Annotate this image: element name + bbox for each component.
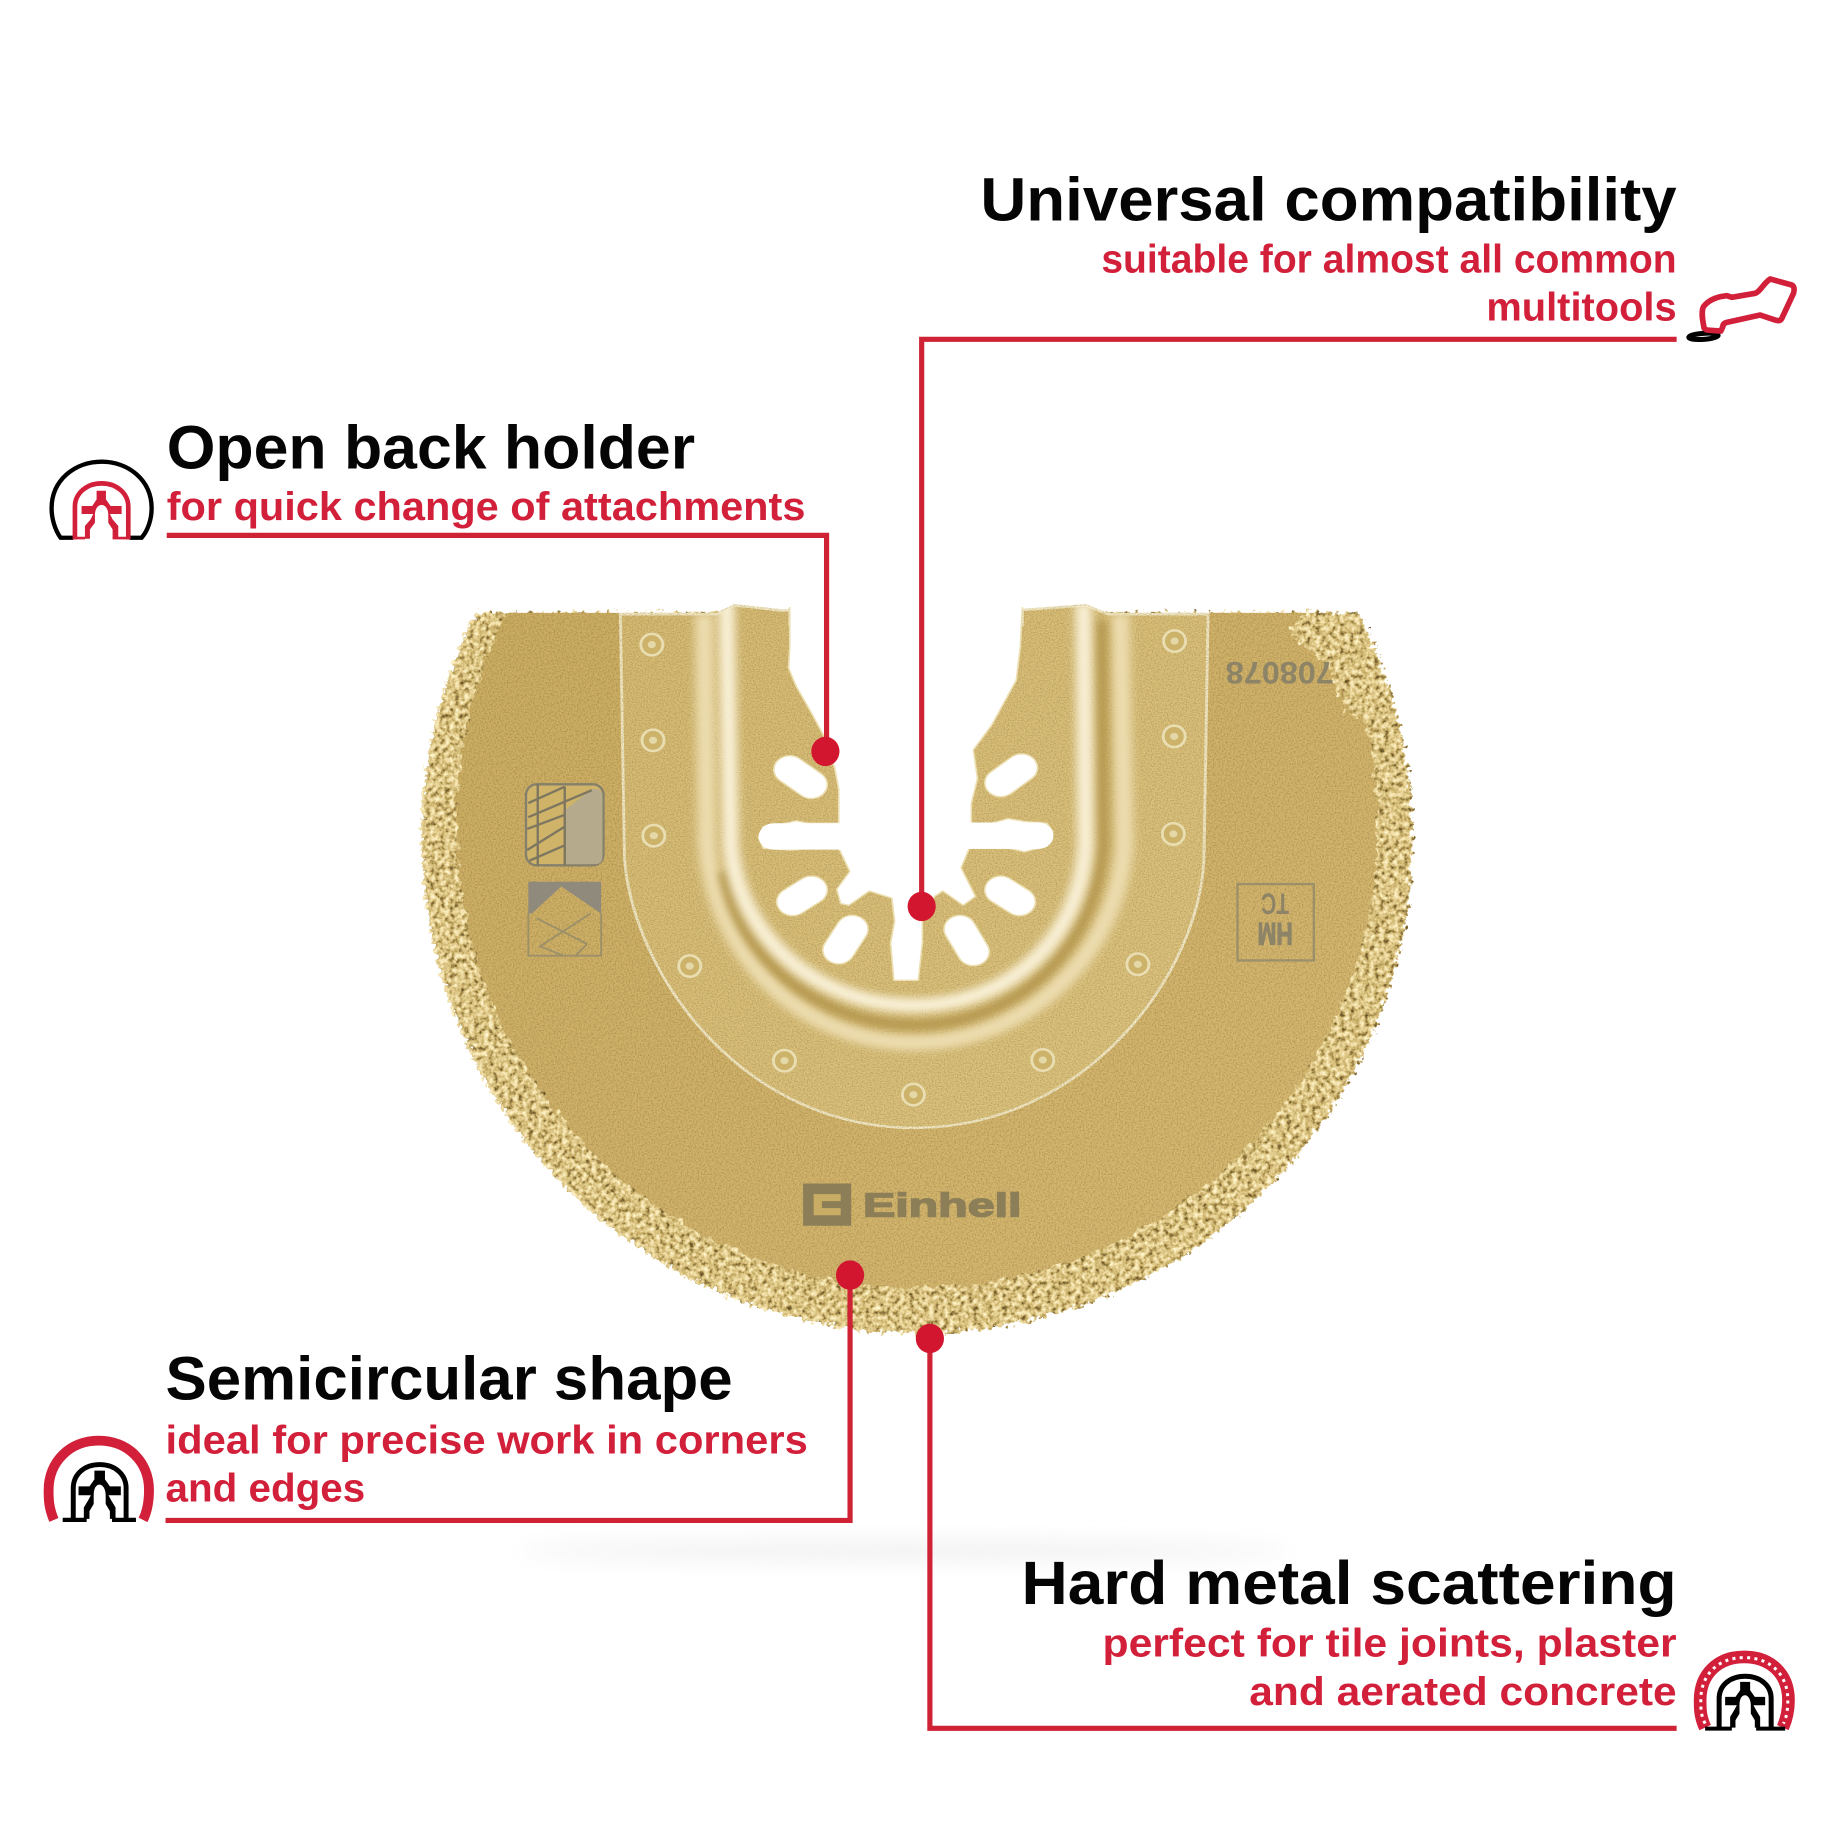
central opening (758, 607, 1053, 980)
mounting plate (620, 604, 1208, 1128)
leader line (930, 1338, 1677, 1728)
icon: multitool (1689, 279, 1794, 340)
leader dot (836, 1260, 864, 1290)
blade body (457, 605, 1377, 1288)
heading: Hard metal scattering (1021, 1549, 1677, 1617)
heading: Semicircular shape (166, 1345, 733, 1413)
grit patch top right (1289, 613, 1376, 716)
serial number: 708078 (1226, 655, 1334, 691)
brand logo (803, 1184, 1021, 1226)
callout: open back holder (52, 413, 839, 766)
description: and aerated concrete (1249, 1670, 1677, 1714)
description: suitable for almost all common (1101, 237, 1677, 281)
material mark: HM TC box: TC (1261, 886, 1289, 919)
callout: universal compatibility (908, 166, 1794, 921)
leader dot (916, 1324, 944, 1353)
heading: Open back holder (167, 413, 695, 481)
description: ideal for precise work in corners (166, 1419, 808, 1463)
plate ridge highlights (704, 604, 1124, 1043)
leader line (922, 339, 1677, 906)
icon: hard metal arch (1700, 1657, 1788, 1729)
leader dot (908, 892, 936, 921)
icon: semicircular arch (49, 1441, 149, 1520)
brand logo: Einhell (863, 1186, 1021, 1223)
description: multitools (1486, 286, 1677, 330)
material mark: HM TC box: HM (1257, 916, 1293, 952)
leader line (166, 1275, 850, 1520)
description (166, 1419, 808, 1511)
tool slots (790, 768, 1022, 952)
description: and edges (166, 1467, 365, 1511)
leader line (167, 535, 827, 751)
horizontal slots (774, 799, 1038, 873)
description (1101, 237, 1677, 330)
material mark: chevron box (528, 882, 601, 956)
product: semicircular blade (422, 604, 1412, 1333)
callout: semicircular shape (49, 1260, 864, 1520)
description: perfect for tile joints, plaster (1102, 1622, 1677, 1666)
heading: Universal compatibility (980, 166, 1677, 234)
rivets (641, 630, 1186, 1105)
material mark: HM TC box (1238, 884, 1314, 960)
callout: hard metal scattering (916, 1324, 1788, 1729)
leader dot (811, 737, 839, 766)
description (1102, 1622, 1677, 1714)
material mark: hatched square (526, 784, 603, 865)
icon: open back holder (52, 462, 152, 539)
ground shadow (517, 1543, 1292, 1559)
description: for quick change of attachments (167, 485, 805, 529)
blade grit rim (422, 613, 1412, 1333)
